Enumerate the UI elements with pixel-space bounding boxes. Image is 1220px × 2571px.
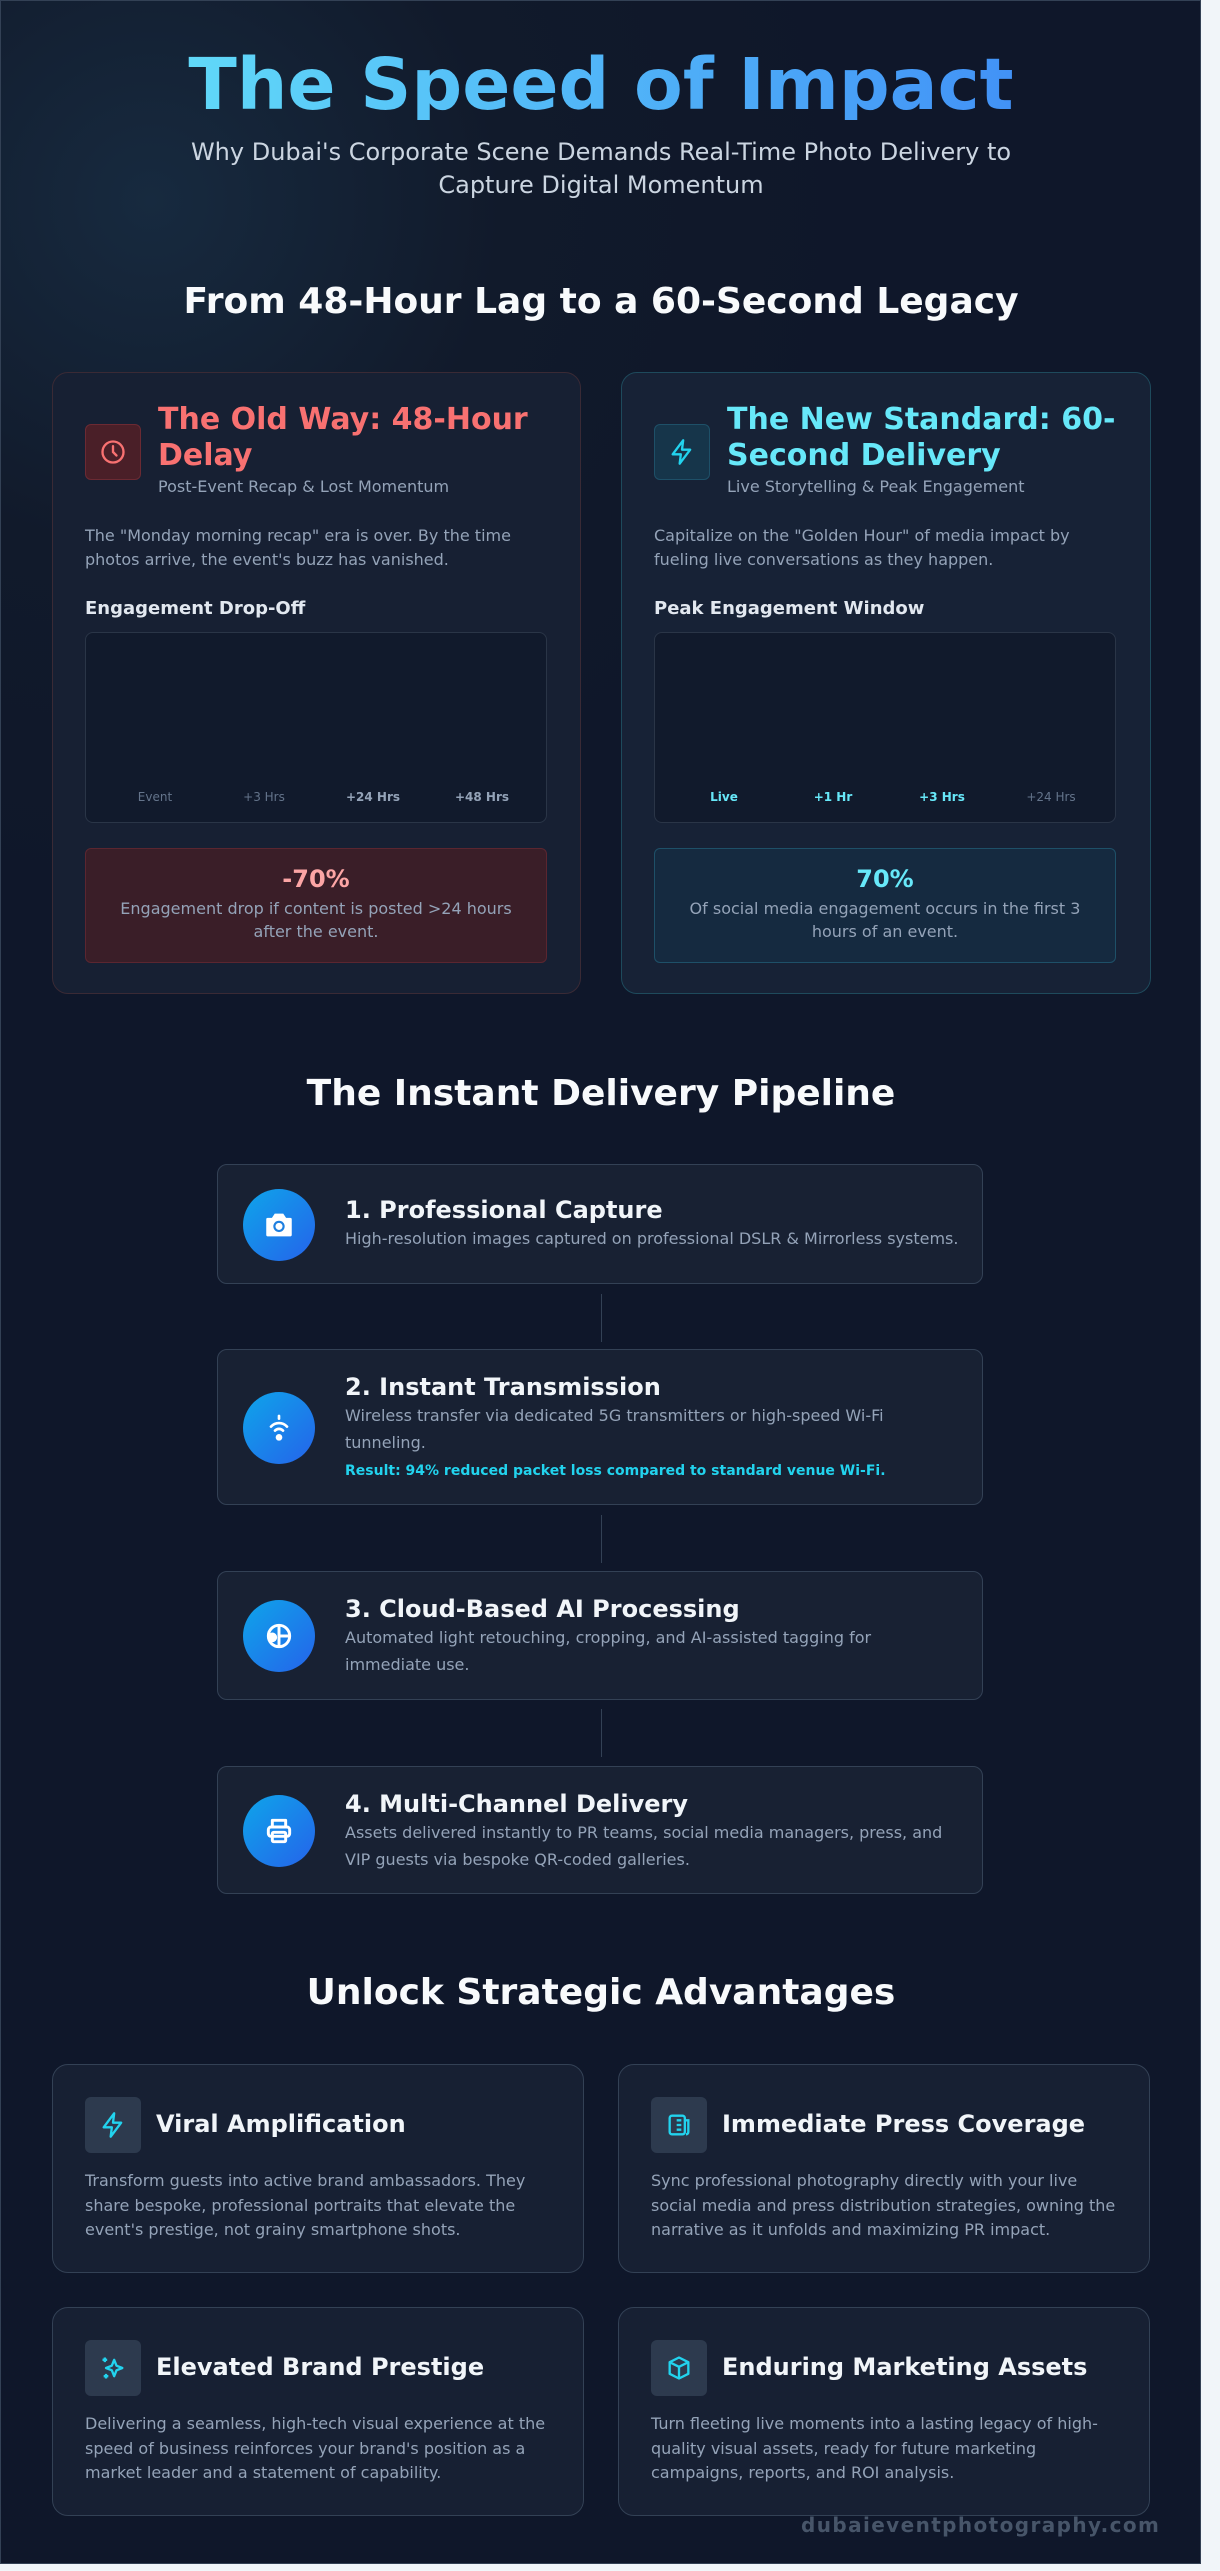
heading: comparison: From 48-Hour Lag to a 60-Second Legacy (183, 281, 1019, 322)
step 4: 4. Multi-Channel Delivery (345, 1790, 688, 1818)
callout: 70% (654, 848, 1116, 963)
panel: old way (52, 372, 581, 994)
icon: printer (243, 1795, 315, 1867)
card subtitle: Post-Event Recap & Lost Momentum (158, 477, 449, 496)
advantage: assets (618, 2307, 1150, 2516)
callout: -70%: after the event. (254, 922, 378, 941)
callout: 70%: hours of an event. (812, 922, 958, 941)
chart: peak engagement: +24 Hrs (1026, 790, 1076, 804)
step 3 (217, 1571, 983, 1700)
card title: The Old Way: 48-Hour Delay (158, 402, 528, 473)
chart label: Peak Engagement Window (654, 598, 924, 619)
callout: -70% (85, 848, 547, 963)
chart: peak engagement: Live (710, 790, 738, 804)
chart: peak engagement (654, 632, 1116, 823)
step 2: 2. Instant Transmission (345, 1373, 661, 1401)
step 2: Wireless transfer via dedicated 5G transmitters or high-speed Wi-Fi tunneling. (345, 1406, 884, 1452)
icon: ai processing (243, 1600, 315, 1672)
chart: engagement drop-off: Event (138, 790, 172, 804)
chart: engagement drop-off: +48 Hrs (455, 790, 509, 804)
step 2 (217, 1349, 983, 1505)
icon: bolt (85, 2097, 141, 2153)
advantage: press (618, 2064, 1150, 2273)
heading: advantages: Unlock Strategic Advantages (307, 1972, 895, 2013)
chart: engagement drop-off (85, 632, 547, 823)
step 3: Automated light retouching, cropping, and AI-assisted tagging for immediate use. (345, 1628, 871, 1674)
advantage: assets: Enduring Marketing Assets (722, 2353, 1087, 2381)
advantage: prestige: Elevated Brand Prestige (156, 2353, 484, 2381)
subtitle (191, 138, 1011, 199)
step 4 (217, 1766, 983, 1894)
chart: peak engagement: +1 Hr (814, 790, 852, 804)
icon: newspaper (651, 2097, 707, 2153)
step 1: 1. Professional Capture (345, 1196, 663, 1224)
icon: wireless (243, 1392, 315, 1464)
callout: 70%: Of social media engagement occurs in the first 3 (690, 899, 1080, 918)
subtitle: Capture Digital Momentum (438, 171, 764, 199)
advantage: prestige: Delivering a seamless, high-tech visual experience at the speed of business reinforces your brand's position as a market leader and a statement of capability. (85, 2414, 545, 2482)
advantage: viral: Viral Amplification (156, 2110, 406, 2138)
advantage: assets: Turn fleeting live moments into a lasting legacy of high-quality visual assets, ready for future marketing campaigns, reports, and ROI analysis. (651, 2414, 1098, 2482)
icon: clock (85, 424, 141, 480)
footer: website: dubaieventphotography.com (801, 2513, 1160, 2537)
heading: pipeline: The Instant Delivery Pipeline (307, 1073, 895, 1114)
title: The Speed of Impact (188, 43, 1014, 126)
step 1 (217, 1164, 983, 1284)
callout: -70%: Engagement drop if content is posted >24 hours (120, 899, 512, 918)
advantage: press: Sync professional photography directly with your live social media and press distribution strategies, owning the narrative as it unfolds and maximizing PR impact. (651, 2171, 1115, 2239)
callout: 70%: 70% (856, 865, 914, 893)
icon: cube (651, 2340, 707, 2396)
advantage: viral (52, 2064, 584, 2273)
step 4: Assets delivered instantly to PR teams, social media managers, press, and VIP guests via bespoke QR-coded galleries. (345, 1823, 942, 1869)
chart: engagement drop-off: +24 Hrs (346, 790, 400, 804)
step 1: High-resolution images captured on professional DSLR & Mirrorless systems. (345, 1229, 958, 1248)
step 3: 3. Cloud-Based AI Processing (345, 1595, 740, 1623)
result callout: Result: 94% reduced packet loss compared to standard venue Wi-Fi. (345, 1463, 886, 1479)
subtitle: Why Dubai's Corporate Scene Demands Real-Time Photo Delivery to (191, 138, 1011, 166)
advantage: viral: Transform guests into active brand ambassadors. They share bespoke, professional portraits that elevate the event's prestige, not grainy smartphone shots. (85, 2171, 525, 2239)
icon: sparkles (85, 2340, 141, 2396)
advantage: prestige (52, 2307, 584, 2516)
body text: Capitalize on the "Golden Hour" of media impact by fueling live conversations as they happen. (654, 526, 1070, 569)
advantage: press: Immediate Press Coverage (722, 2110, 1085, 2138)
card title: The New Standard: 60-Second Delivery (727, 402, 1115, 473)
panel: new standard (621, 372, 1151, 994)
chart: peak engagement: +3 Hrs (919, 790, 965, 804)
chart label: Engagement Drop-Off (85, 598, 305, 619)
callout: -70%: -70% (282, 865, 350, 893)
chart: engagement drop-off: +3 Hrs (243, 790, 285, 804)
icon: camera (243, 1189, 315, 1261)
card subtitle: Live Storytelling & Peak Engagement (727, 477, 1025, 496)
icon: bolt (654, 424, 710, 480)
body text: The "Monday morning recap" era is over. By the time photos arrive, the event's buzz has vanished. (85, 526, 511, 569)
